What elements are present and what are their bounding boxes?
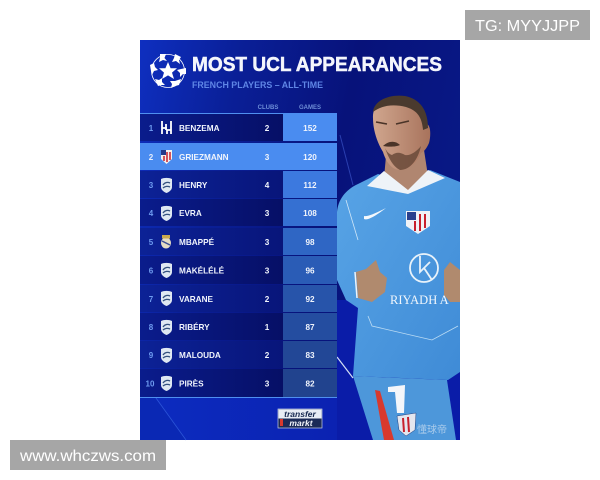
row 4: Evra: 108 [303, 209, 317, 218]
sponsor logo [410, 254, 438, 282]
row 6: Makélélé [140, 256, 337, 284]
row 4: Evra: EVRA [179, 209, 202, 218]
nike swoosh [364, 208, 386, 219]
shorts [353, 376, 456, 440]
row 9: Malouda: 2 [265, 351, 270, 360]
hair [373, 96, 428, 130]
row 8: Ribéry: 87 [305, 323, 315, 332]
row 5: Mbappé: 98 [305, 238, 315, 247]
row 2: Griezmann: 120 [303, 153, 317, 162]
row 1: Benzema [140, 113, 337, 141]
row 1: Benzema: 152 [303, 124, 317, 133]
row 10: Pirès [140, 369, 337, 398]
row 7: Varane: VARANE [179, 295, 214, 304]
row 3: Henry: 3 [149, 181, 154, 190]
row 9: Malouda: MALOUDA [179, 351, 221, 360]
row 5: Mbappé: 5 [149, 238, 154, 247]
row 10: Pirès: 3 [265, 380, 270, 388]
row 5: Mbappé [140, 228, 337, 255]
row 8: Ribéry: RIBÉRY [179, 322, 210, 332]
row 5: Mbappé: 3 [265, 238, 270, 247]
row 7: Varane: 2 [265, 295, 270, 304]
row 10: Pirès: 82 [305, 380, 315, 388]
ranking table [140, 113, 337, 398]
row 10: Pirès: PIRÈS [179, 378, 204, 388]
row 2: Griezmann [140, 143, 337, 170]
row 3: Henry [140, 171, 337, 198]
row 9: Malouda [140, 341, 337, 368]
shirt body [337, 170, 460, 380]
row 6: Makélélé: 3 [265, 266, 270, 276]
row 1: Benzema: BENZEMA [179, 124, 220, 133]
row 7: Varane [140, 285, 337, 312]
sponsor text: RIYADH A [390, 293, 449, 307]
beard [385, 146, 421, 170]
row 3: Henry: 4 [265, 181, 270, 190]
row 3: Henry: 112 [303, 181, 317, 190]
row 7: Varane: 92 [305, 295, 315, 304]
row 10: Pirès: 10 [146, 380, 155, 388]
row 5: Mbappé: MBAPPÉ [179, 237, 215, 247]
row 3: Henry: HENRY [179, 181, 208, 190]
neck [384, 150, 428, 192]
row 2: Griezmann: 3 [265, 153, 270, 162]
row 8: Ribéry: 1 [265, 323, 270, 332]
watermark: TG handle [465, 10, 590, 40]
row 6: Makélélé: 6 [149, 266, 154, 276]
row 1: Benzema: 1 [149, 124, 154, 133]
row 6: Makélélé: 96 [305, 266, 315, 276]
row 2: Griezmann: GRIEZMANN [179, 153, 229, 162]
hands [356, 260, 387, 302]
row 4: Evra: 4 [149, 209, 154, 218]
row 7: Varane: 7 [149, 295, 154, 304]
moustache and mouth [383, 142, 400, 147]
transfermarkt logo: markt [289, 418, 314, 428]
row 2: Griezmann: 2 [149, 153, 154, 162]
row 4: Evra [140, 199, 337, 226]
column headers: GAMES [299, 105, 321, 111]
row 9: Malouda: 9 [149, 351, 154, 360]
eyes [376, 121, 409, 124]
title: MOST UCL APPEARANCES [192, 53, 442, 76]
watermark: TG handle: TG: MYYJJPP [475, 18, 580, 35]
crest [406, 211, 430, 234]
collar [367, 170, 445, 194]
icon: Champions League starball [150, 54, 186, 88]
poster background [140, 40, 460, 440]
subtitle: FRENCH PLAYERS – ALL-TIME [192, 80, 323, 90]
row 8: Ribéry [140, 313, 337, 340]
row 4: Evra: 3 [265, 209, 270, 218]
row 1: Benzema: 2 [265, 124, 270, 133]
transfermarkt logo: transfer [284, 409, 317, 419]
row 9: Malouda: 83 [305, 351, 315, 360]
transfermarkt logo [278, 409, 322, 428]
watermark: website [10, 440, 166, 470]
head [373, 97, 430, 170]
player photo: Griezmann [337, 96, 460, 440]
watermark: source mark: 懂球帝 [417, 423, 447, 436]
row 6: Makélélé: MAKÉLÉLÉ [179, 266, 225, 276]
row 8: Ribéry: 8 [149, 323, 154, 332]
watermark: website: www.whczws.com [19, 448, 156, 465]
column headers [258, 105, 321, 111]
column headers: CLUBS [258, 105, 278, 111]
